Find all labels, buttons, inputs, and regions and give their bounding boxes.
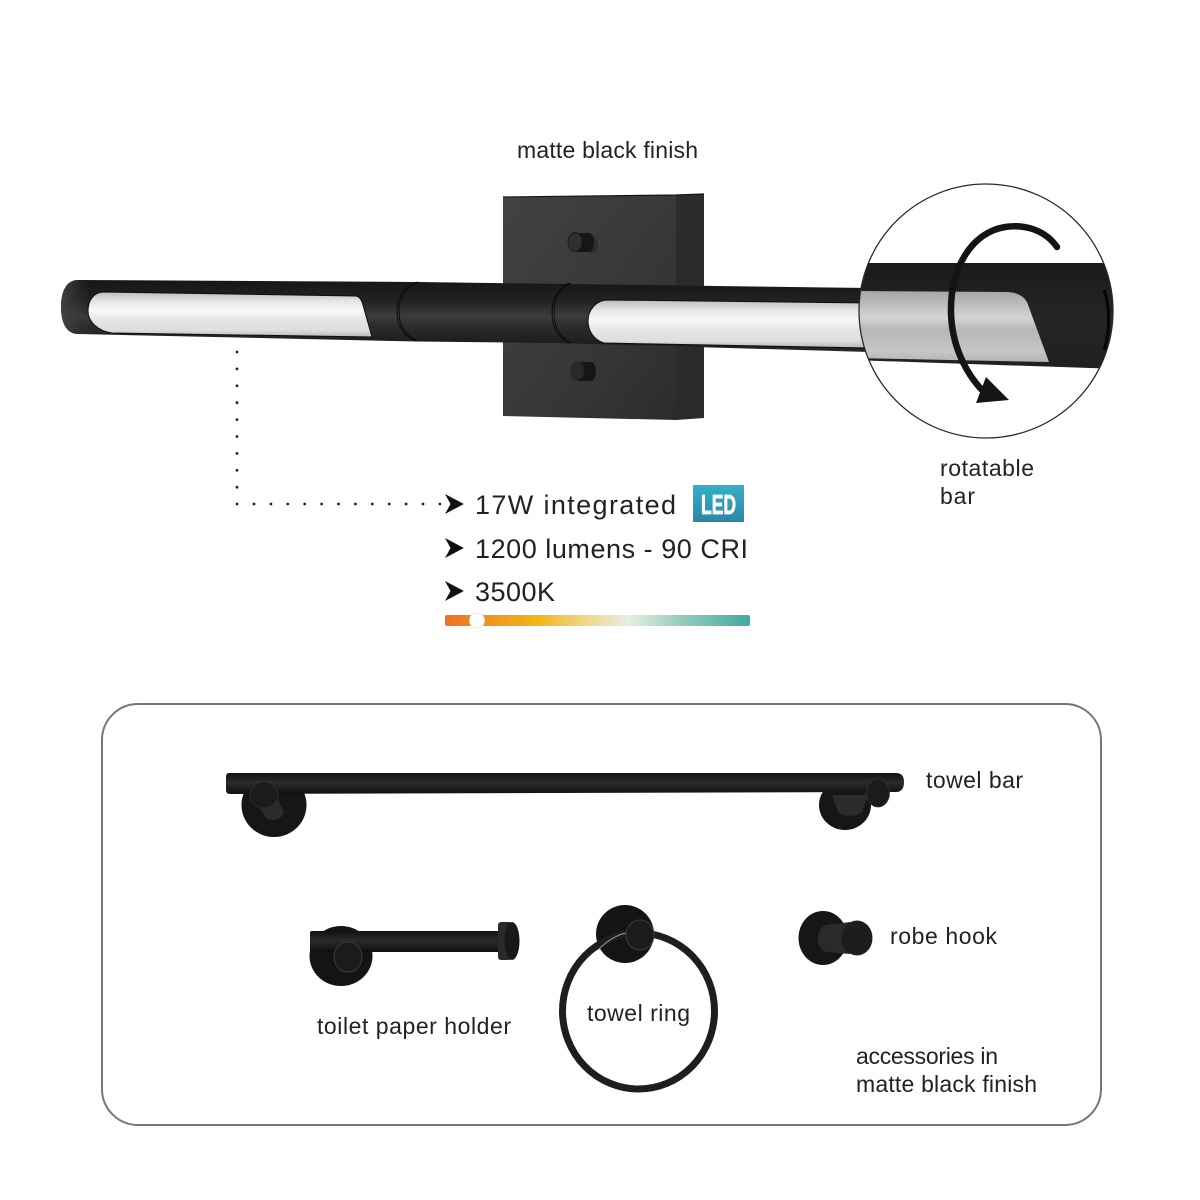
robe hook [798,911,872,965]
rotation dotted leader line [237,352,444,504]
label: rotatable bar: bar [940,483,975,509]
towel bar [226,773,904,837]
accessories panel [102,704,1101,1125]
icon: LED badge: LED [701,489,736,520]
magnified bar end [850,263,1120,369]
bar joints [397,282,571,343]
wall light fixture [61,194,869,420]
label: toilet paper holder: toilet paper holder [317,1013,511,1039]
label: rotatable bar: rotatable [940,455,1034,481]
label: matte black finish: matte black finish [517,137,698,163]
toilet paper holder [310,922,520,986]
left light panel [88,292,372,337]
lower mounting peg [570,362,596,381]
right light panel [588,300,869,348]
towel ring [562,905,714,1089]
colour temperature scale [445,613,750,628]
note: accessories finish: matte black finish [856,1071,1037,1097]
label: towel bar: towel bar [926,767,1023,793]
backplate [503,194,704,420]
note: accessories finish: accessories in [856,1043,998,1069]
icon: LED badge [693,485,744,522]
spec: lumens and CRI: 1200 lumens - 90 CRI [475,534,748,564]
upper mounting peg [568,232,598,254]
light bar body [61,280,869,352]
magnified detail circle [850,184,1120,438]
spec list [445,485,750,628]
note: accessories finish [856,1043,1037,1097]
label: towel ring: towel ring [587,1000,690,1026]
spec: colour temperature: 3500K [475,577,555,607]
label: rotatable bar [940,455,1034,509]
spec: 17W integrated: 17W integrated [475,490,676,520]
bar end cap shading [61,280,92,334]
label: robe hook: robe hook [890,923,998,949]
rotation arrow [951,226,1057,403]
